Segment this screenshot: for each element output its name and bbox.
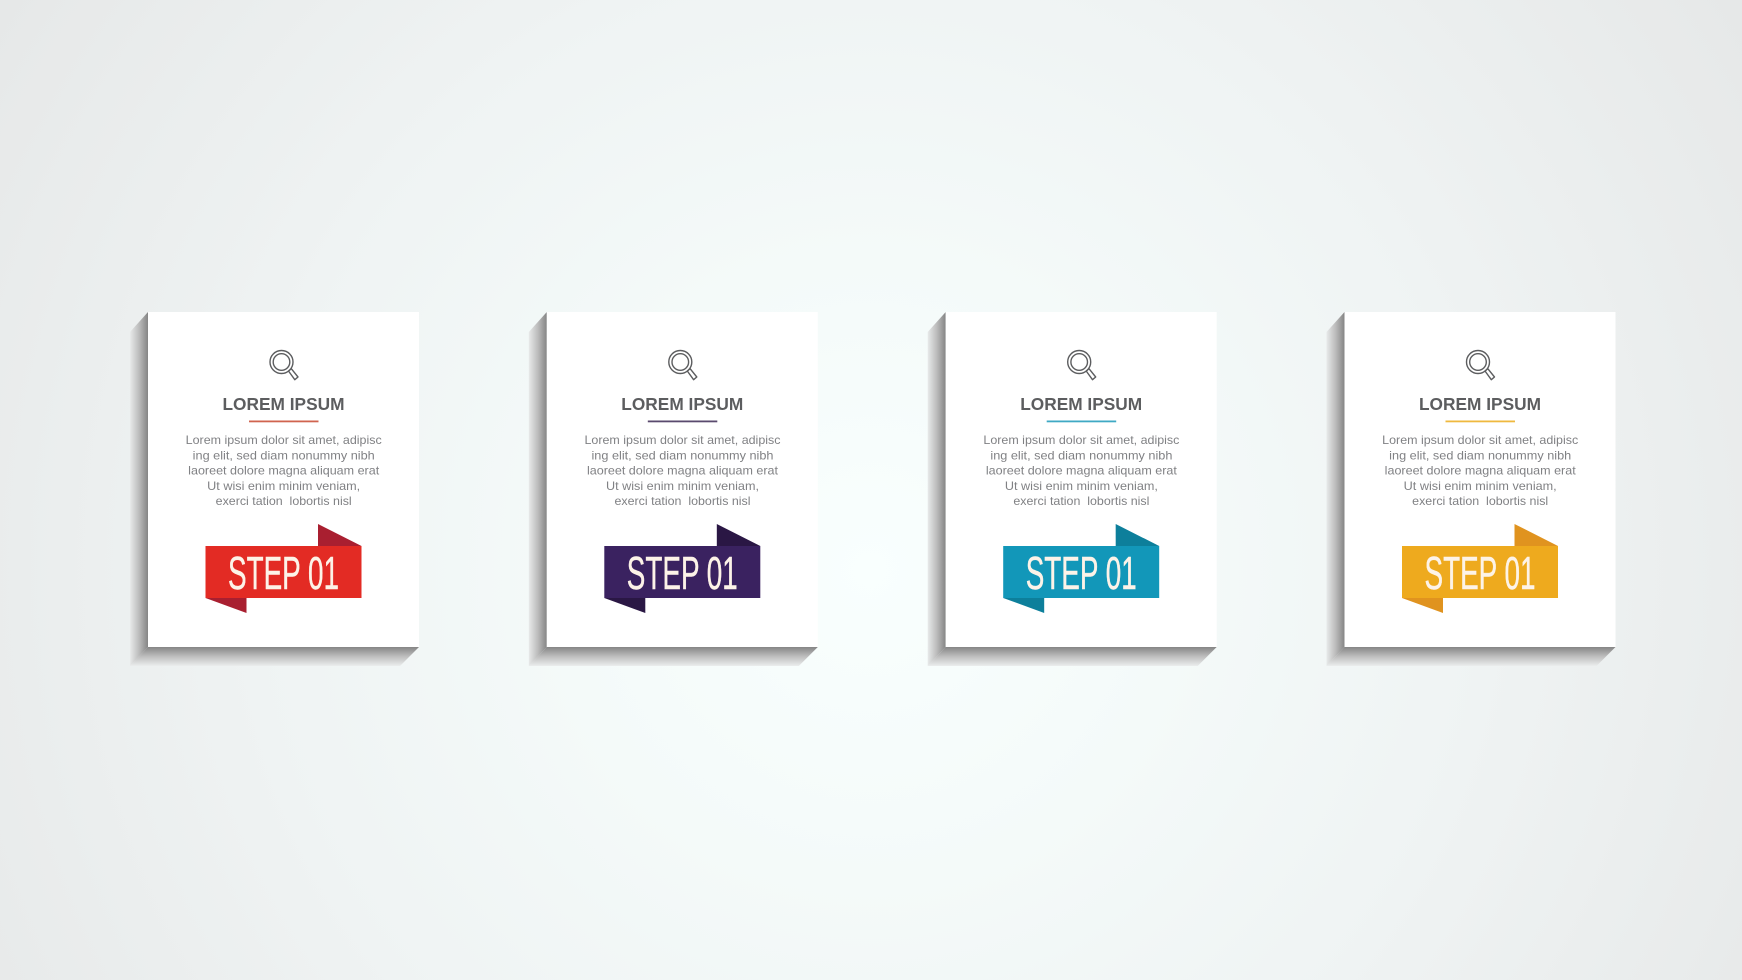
card shadow [529, 312, 818, 666]
text block [584, 433, 780, 508]
text block: Lorem ipsum dolor sit amet, adipisc [983, 433, 1179, 447]
text block: Ut wisi enim minim veniam, [1404, 479, 1557, 493]
text block: laoreet dolore magna aliquam erat [1385, 464, 1576, 478]
underline accent [1446, 420, 1515, 422]
icon: magnifying glass [669, 350, 697, 380]
text block [983, 433, 1179, 508]
text block: ing elit, sed diam nonummy nibh [990, 448, 1172, 462]
text block: exerci tation lobortis nisl [1412, 494, 1548, 508]
text block: Ut wisi enim minim veniam, [207, 479, 360, 493]
heading: LOREM IPSUM [621, 394, 743, 414]
text block: Lorem ipsum dolor sit amet, adipisc [584, 433, 780, 447]
card shadow [130, 312, 419, 666]
ribbon: step 01 [604, 524, 760, 613]
ribbon: step 01: STEP 01 [627, 547, 738, 599]
heading: LOREM IPSUM [1419, 394, 1541, 414]
text block: ing elit, sed diam nonummy nibh [1389, 448, 1571, 462]
text block: laoreet dolore magna aliquam erat [188, 464, 380, 478]
text block: exerci tation lobortis nisl [216, 494, 352, 508]
text block: exerci tation lobortis nisl [614, 494, 750, 508]
icon: magnifying glass [1466, 350, 1494, 380]
panel: card 1 red [130, 312, 419, 666]
ribbon: step 01 [206, 524, 362, 613]
ribbon: step 01: STEP 01 [1424, 547, 1536, 599]
underline accent [1047, 420, 1116, 422]
panel: card 2 purple [529, 312, 818, 666]
text block: Ut wisi enim minim veniam, [1005, 479, 1158, 493]
card body [946, 312, 1217, 647]
icon: magnifying glass [270, 350, 298, 380]
text block [186, 433, 382, 508]
icon: magnifying glass [1068, 350, 1096, 380]
ribbon: step 01 [1402, 524, 1558, 613]
text block: laoreet dolore magna aliquam erat [986, 464, 1178, 478]
underline accent [648, 420, 717, 422]
ribbon: step 01: STEP 01 [228, 547, 339, 599]
text block: ing elit, sed diam nonummy nibh [193, 448, 375, 462]
text block: ing elit, sed diam nonummy nibh [592, 448, 774, 462]
heading: LOREM IPSUM [1020, 394, 1142, 414]
text block [1382, 433, 1578, 508]
card shadow [928, 312, 1217, 666]
text block: exerci tation lobortis nisl [1013, 494, 1149, 508]
underline accent [249, 420, 318, 422]
ribbon: step 01: STEP 01 [1026, 547, 1137, 599]
card body [148, 312, 419, 647]
card body [547, 312, 818, 647]
text block: laoreet dolore magna aliquam erat [587, 464, 779, 478]
card shadow [1326, 312, 1616, 666]
text block: Lorem ipsum dolor sit amet, adipisc [186, 433, 382, 447]
ribbon: step 01 [1003, 524, 1159, 613]
card body [1344, 312, 1616, 647]
panel: card 3 blue [928, 312, 1217, 666]
heading: LOREM IPSUM [222, 394, 344, 414]
text block: Lorem ipsum dolor sit amet, adipisc [1382, 433, 1578, 447]
text block: Ut wisi enim minim veniam, [606, 479, 759, 493]
panel: card 4 yellow [1326, 312, 1616, 666]
